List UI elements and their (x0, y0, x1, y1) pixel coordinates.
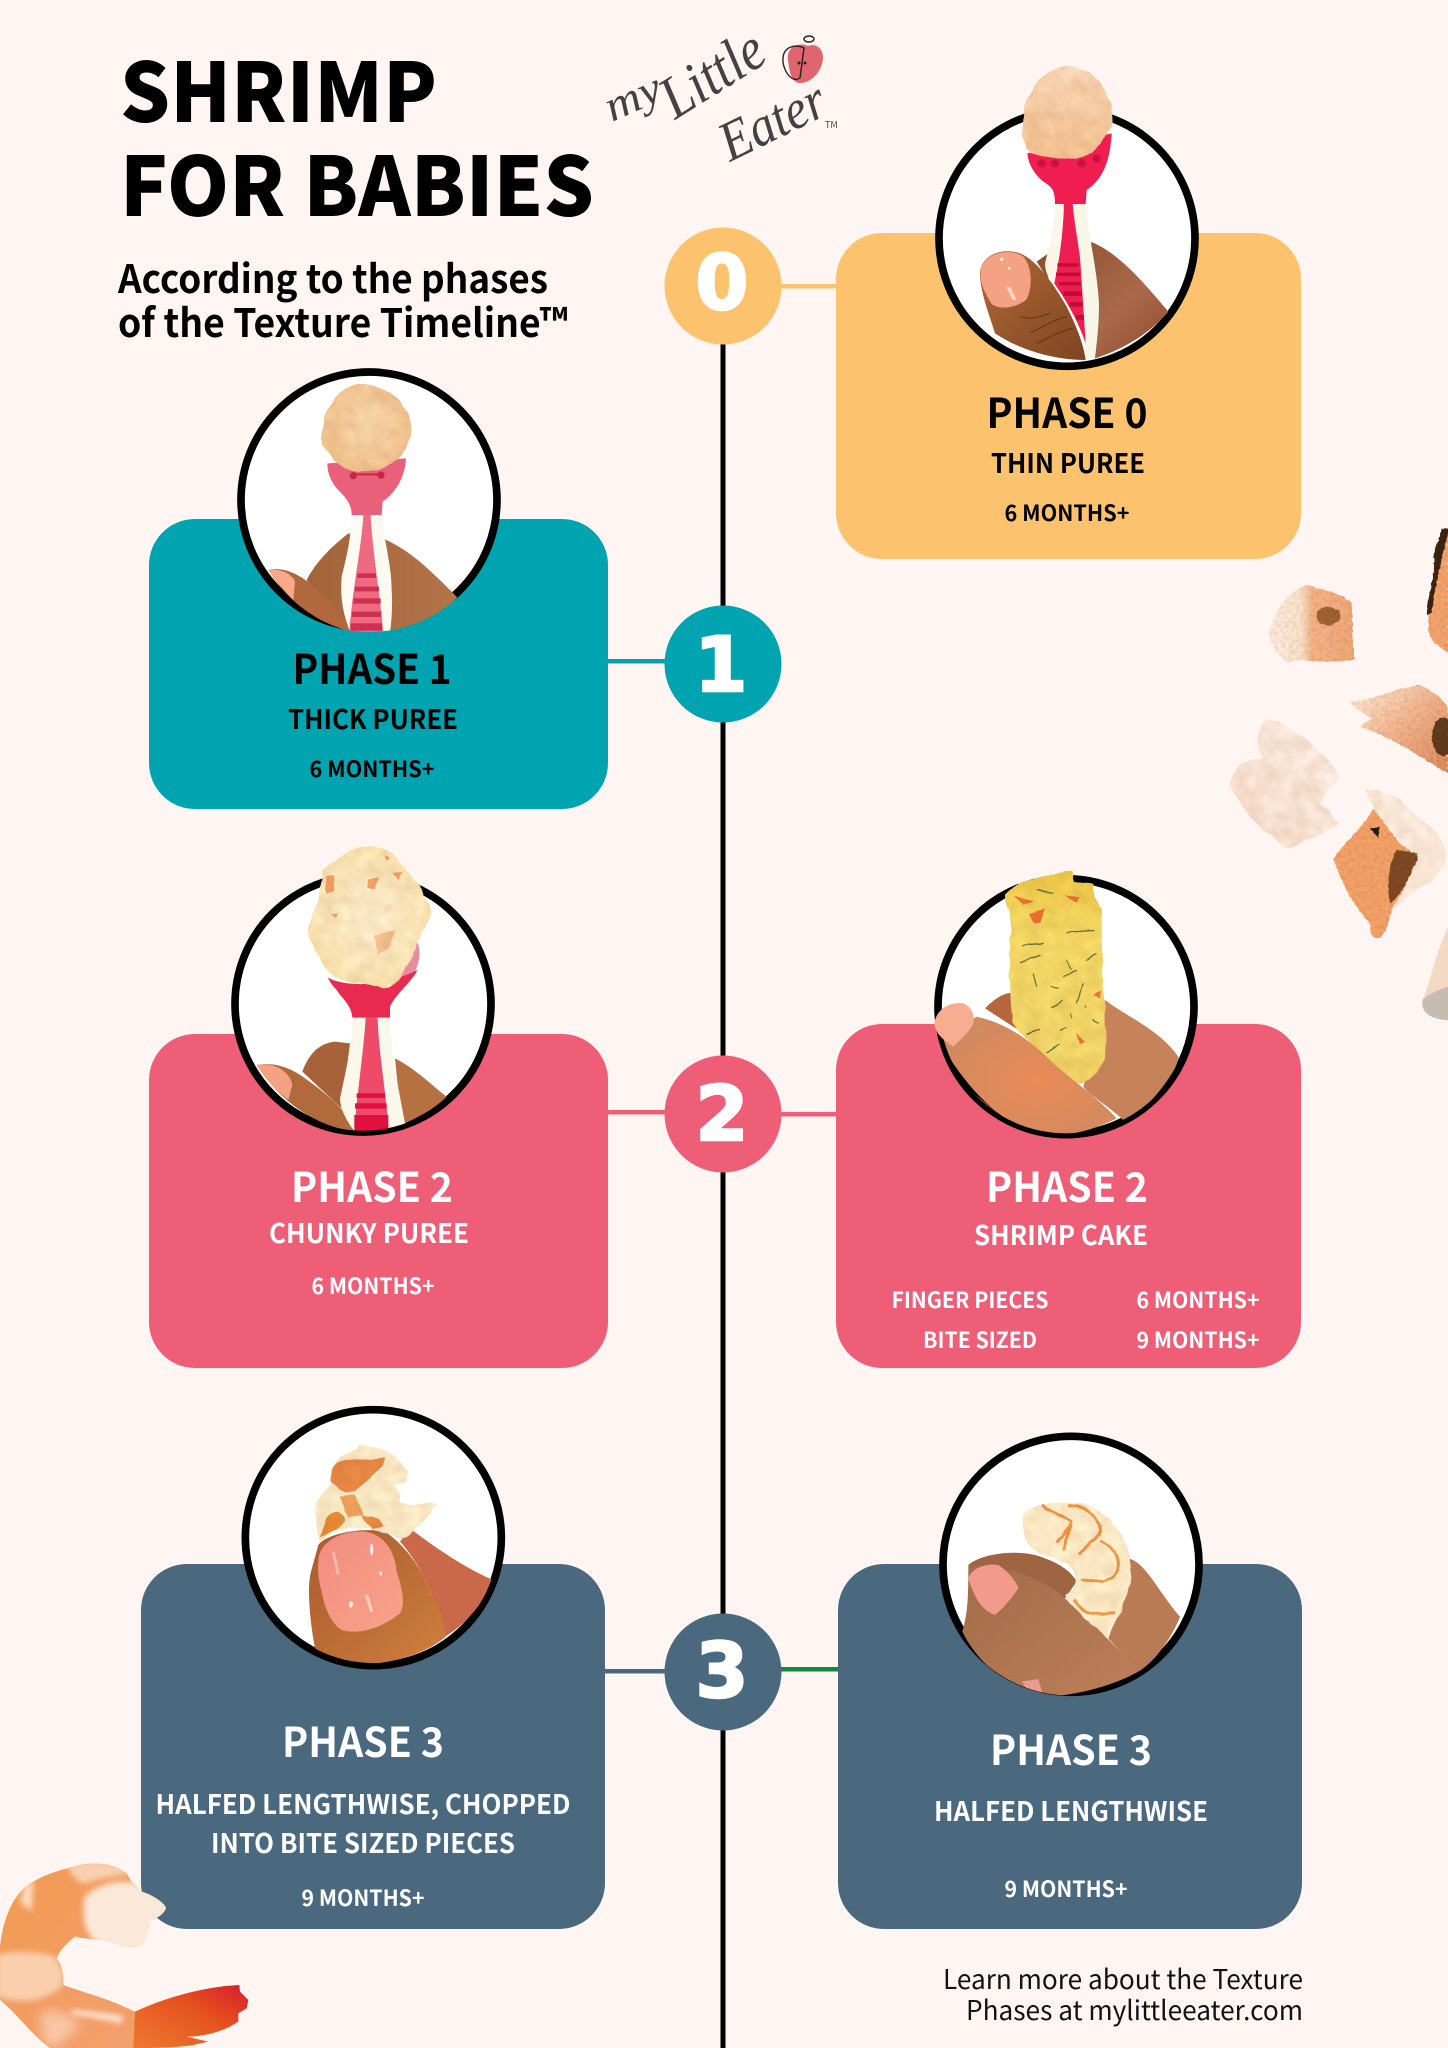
timeline line (720, 300, 726, 2048)
photo: thin puree on spoon (939, 66, 1195, 366)
subheading: halfed lengthwise chopped: HALFED LENGTHWISE, CHOPPED (156, 1783, 570, 1822)
connector: phase 3 left (604, 1669, 666, 1674)
panel: phase 2 shrimp cake (836, 870, 1301, 1368)
subheading: into bite sized pieces: INTO BITE SIZED PIECES (211, 1822, 515, 1861)
badge: phase 3 (664, 1614, 782, 1730)
panel: phase 0 (836, 66, 1301, 559)
subtitle: of the Texture Timeline™ (118, 293, 568, 349)
subtitle (117, 249, 568, 349)
heading: phase 0: PHASE 0 (986, 380, 1148, 440)
decoration: whole cooked shrimp (0, 1861, 248, 2048)
heading: phase 3: PHASE 3 (282, 1709, 444, 1769)
badge: phase 2 (664, 1056, 782, 1172)
decoration: cooked shrimp pieces (1230, 528, 1448, 1020)
heading: phase 3: PHASE 3 (990, 1717, 1152, 1777)
heading: phase 2: PHASE 2 (291, 1154, 453, 1214)
age: 9 months: 9 MONTHS+ (1004, 1872, 1128, 1904)
connector: phase 1 (607, 659, 667, 664)
subheading: thin puree: THIN PUREE (991, 442, 1145, 481)
panel: phase 3 halved (838, 1436, 1302, 1929)
title: SHRIMP (120, 27, 437, 146)
connector: phase 2 right (780, 1112, 837, 1116)
title (120, 27, 594, 240)
connector: phase 2 left (607, 1110, 667, 1114)
badge: phase 0 (664, 228, 782, 344)
badge: phase 3: 3 (696, 1626, 748, 1715)
heading: phase 2: PHASE 2 (986, 1154, 1148, 1214)
subheading: chunky puree: CHUNKY PUREE (269, 1212, 469, 1251)
card: phase 3 right background (838, 1564, 1302, 1929)
logo: My Little Eater: Little (646, 16, 777, 131)
card: phase 1 background (149, 519, 608, 809)
panel: phase 1 (149, 372, 608, 809)
logo: My Little Eater: Eater (708, 69, 837, 174)
footer note: Learn more about the Texture (943, 1958, 1303, 1997)
age: 6 months: 6 MONTHS+ (310, 752, 435, 784)
photo: halved shrimp between fingers (943, 1436, 1199, 1697)
photo: thick puree on spoon (241, 372, 497, 633)
footer note (943, 1958, 1303, 2028)
subheading: shrimp cake: SHRIMP CAKE (974, 1214, 1148, 1253)
photo: chunky puree on spoon (235, 846, 491, 1132)
subheading: halfed lengthwise: HALFED LENGTHWISE (934, 1790, 1208, 1829)
age: 6 months: 6 MONTHS+ (1004, 496, 1130, 528)
logo: My Little Eater (596, 16, 838, 174)
connector: phase 0 (775, 284, 837, 288)
footer note: Phases at mylittleeater.com (966, 1989, 1303, 2028)
subtitle: According to the phases (117, 249, 548, 305)
subheading: thick puree: THICK PUREE (288, 698, 458, 737)
logo: My Little Eater: my (596, 63, 670, 131)
age: 6 months: 6 MONTHS+ (312, 1269, 435, 1301)
panel: phase 3 chopped (141, 1410, 605, 1929)
panel: phase 2 chunky puree (149, 846, 608, 1368)
logo: My Little Eater: TM (825, 118, 838, 131)
photo: shrimp cake in hand (934, 870, 1194, 1135)
card: phase 0 background (836, 233, 1301, 559)
badge: phase 1: 1 (695, 620, 747, 709)
photo: chopped shrimp piece between fingers (245, 1410, 501, 1666)
title: FOR BABIES (120, 121, 594, 240)
age: bite sized 9 months: 9 MONTHS+ (1136, 1323, 1260, 1355)
icon: apple (783, 36, 823, 83)
card: phase 3 left background (141, 1564, 605, 1929)
age: 9 months: 9 MONTHS+ (302, 1881, 425, 1913)
badge: phase 0: 0 (696, 238, 748, 327)
age: finger pieces 6 months: 6 MONTHS+ (1136, 1283, 1260, 1315)
serving: finger pieces: FINGER PIECES (892, 1283, 1048, 1315)
card: phase 2 left background (149, 1034, 608, 1368)
serving: bite sized: BITE SIZED (923, 1323, 1037, 1355)
heading: phase 1: PHASE 1 (292, 636, 452, 696)
badge: phase 2: 2 (696, 1069, 748, 1158)
badge: phase 1 (664, 606, 782, 722)
connector: phase 3 right (780, 1667, 840, 1672)
card: phase 2 right background (836, 1024, 1301, 1368)
